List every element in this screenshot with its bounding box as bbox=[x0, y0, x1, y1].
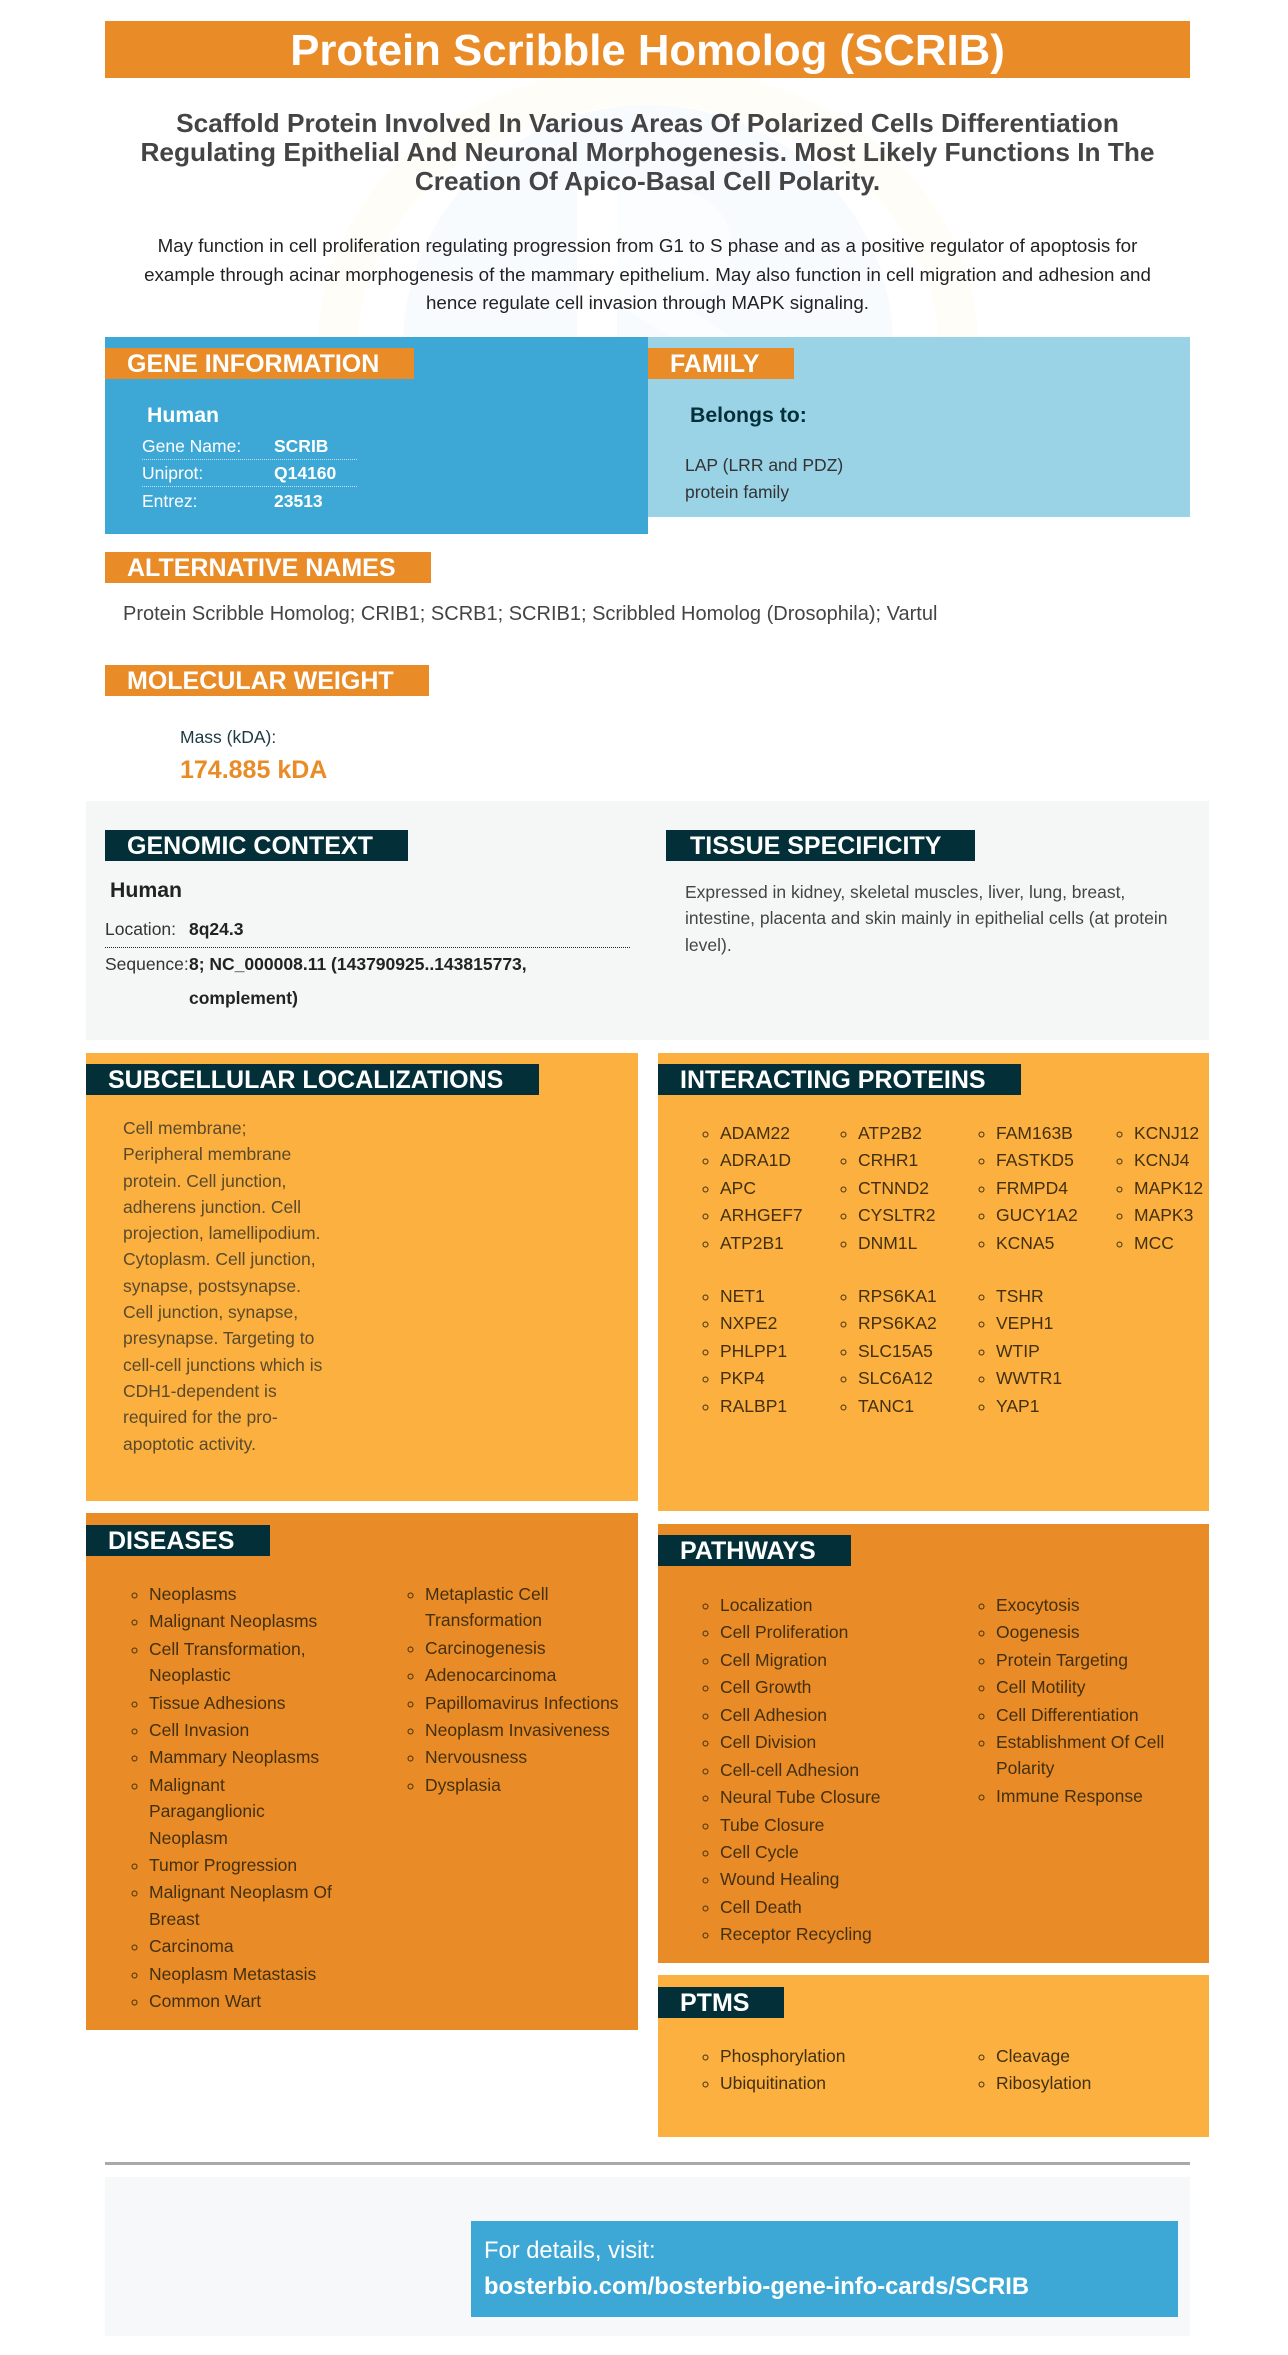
panel: ptms bbox=[658, 1975, 1209, 2137]
title: Protein Scribble Homolog (SCRIB) bbox=[290, 26, 1005, 75]
belongs to label: Belongs to: bbox=[690, 403, 807, 427]
protein list column 6: TANC1 bbox=[858, 1396, 914, 1416]
disease list column 1: Tissue Adhesions bbox=[149, 1693, 286, 1713]
ptm list column 1: Ubiquitination bbox=[720, 2073, 826, 2093]
disease list column 1: Mammary Neoplasms bbox=[149, 1747, 319, 1767]
protein list column 7: WTIP bbox=[996, 1341, 1040, 1361]
disease list column 2: Carcinogenesis bbox=[425, 1638, 546, 1658]
disease list column 1: Common Wart bbox=[149, 1991, 261, 2011]
disease list column 2: Metaplastic Cell bbox=[425, 1584, 549, 1604]
protein list column 4: KCNJ4 bbox=[1134, 1150, 1189, 1170]
sequence row: 8; NC_000008.11 (143790925..143815773, bbox=[189, 954, 527, 974]
protein list column 5: NET1 bbox=[720, 1286, 765, 1306]
panel: subcellular localizations bbox=[86, 1053, 638, 1501]
heading: subcellular localizations: SUBCELLULAR LOCALIZATIONS bbox=[108, 1066, 503, 1094]
gene name row bbox=[142, 433, 357, 460]
pathway list column 1: Cell Proliferation bbox=[720, 1622, 848, 1642]
protein list column 7: TSHR bbox=[996, 1286, 1044, 1306]
protein list column 5 bbox=[702, 1286, 787, 1416]
pathway list column 1: Neural Tube Closure bbox=[720, 1787, 880, 1807]
disease list column 2 bbox=[408, 1584, 619, 1795]
sequence row bbox=[105, 954, 527, 1008]
ptm list column 2 bbox=[978, 2046, 1091, 2093]
localization text: presynapse. Targeting to bbox=[123, 1328, 314, 1348]
protein list column 6: RPS6KA1 bbox=[858, 1286, 937, 1306]
disease list column 1: Malignant Neoplasms bbox=[149, 1611, 317, 1631]
mass value: 174.885 kDA bbox=[180, 756, 327, 784]
ptm list column 2: Cleavage bbox=[996, 2046, 1070, 2066]
protein list column 1: ATP2B1 bbox=[720, 1233, 784, 1253]
protein list column 7: WWTR1 bbox=[996, 1368, 1062, 1388]
protein list column 2: CRHR1 bbox=[858, 1150, 918, 1170]
pathway list column 2: Immune Response bbox=[996, 1786, 1143, 1806]
uniprot row: Q14160 bbox=[274, 463, 336, 483]
protein list column 6: SLC6A12 bbox=[858, 1368, 933, 1388]
protein list column 3: KCNA5 bbox=[996, 1233, 1054, 1253]
panel: family bbox=[648, 337, 1190, 517]
localization text: Cell membrane; bbox=[123, 1118, 247, 1138]
disease list column 1 bbox=[132, 1584, 332, 2011]
localization text: Peripheral membrane bbox=[123, 1144, 291, 1164]
protein list column 5: NXPE2 bbox=[720, 1313, 777, 1333]
localization text: synapse, postsynapse. bbox=[123, 1276, 301, 1296]
entrez row: 23513 bbox=[274, 491, 323, 511]
protein list column 1: ADRA1D bbox=[720, 1150, 791, 1170]
heading: genomic context: GENOMIC CONTEXT bbox=[127, 832, 373, 860]
gene name row: SCRIB bbox=[274, 436, 328, 456]
subtitle: Regulating Epithelial And Neuronal Morphogenesis. Most Likely Functions In The bbox=[140, 137, 1155, 167]
subtitle: Creation Of Apico-Basal Cell Polarity. bbox=[415, 166, 880, 196]
pathway list column 2 bbox=[978, 1595, 1164, 1806]
disease list column 1: Neoplasms bbox=[149, 1584, 237, 1604]
heading: diseases bbox=[86, 1525, 270, 1556]
pathway list column 1: Cell-cell Adhesion bbox=[720, 1760, 859, 1780]
disease list column 1: Tumor Progression bbox=[149, 1855, 297, 1875]
uniprot row: Uniprot: bbox=[142, 463, 203, 483]
pathway list column 1: Cell Growth bbox=[720, 1677, 811, 1697]
disease list column 2: Dysplasia bbox=[425, 1775, 501, 1795]
pathway list column 1: Localization bbox=[720, 1595, 812, 1615]
pathway list column 1: Cell Adhesion bbox=[720, 1705, 827, 1725]
protein list column 6 bbox=[840, 1286, 937, 1416]
pathway list column 1: Cell Migration bbox=[720, 1650, 827, 1670]
protein list column 6: SLC15A5 bbox=[858, 1341, 933, 1361]
subtitle: Scaffold Protein Involved In Various Areas Of Polarized Cells Differentiation bbox=[176, 108, 1119, 138]
tissue specificity text: Expressed in kidney, skeletal muscles, liver, lung, breast, bbox=[685, 882, 1125, 902]
pathway list column 1: Tube Closure bbox=[720, 1814, 824, 1834]
protein list column 3: FAM163B bbox=[996, 1123, 1073, 1143]
heading: family bbox=[648, 348, 794, 379]
heading: pathways bbox=[658, 1535, 851, 1566]
protein list column 7 bbox=[978, 1286, 1062, 1416]
protein list column 5: RALBP1 bbox=[720, 1396, 787, 1416]
disease list column 2: Neoplasm Invasiveness bbox=[425, 1720, 610, 1740]
protein list column 2: CTNND2 bbox=[858, 1178, 929, 1198]
description: example through acinar morphogenesis of the mammary epithelium. May also function in cell migration and adhesion and bbox=[144, 264, 1151, 284]
heading: tissue specificity: TISSUE SPECIFICITY bbox=[690, 832, 941, 860]
alternative names text: Protein Scribble Homolog; CRIB1; SCRB1; SCRIB1; Scribbled Homolog (Drosophila); Vartul bbox=[123, 603, 937, 625]
callout: details link bbox=[471, 2221, 1178, 2317]
disease list column 1: Paraganglionic bbox=[149, 1801, 265, 1821]
entrez row: Entrez: bbox=[142, 491, 197, 511]
protein list column 5: PHLPP1 bbox=[720, 1341, 787, 1361]
pathway list column 1: Receptor Recycling bbox=[720, 1924, 872, 1944]
description: hence regulate cell invasion through MAPK signaling. bbox=[426, 292, 869, 313]
protein list column 4: KCNJ12 bbox=[1134, 1123, 1199, 1143]
heading: diseases: DISEASES bbox=[108, 1527, 234, 1555]
disease list column 1: Cell Invasion bbox=[149, 1720, 249, 1740]
disease list column 1: Malignant Neoplasm Of bbox=[149, 1882, 332, 1902]
disease list column 1: Breast bbox=[149, 1909, 200, 1929]
pathway list column 2: Cell Motility bbox=[996, 1677, 1085, 1697]
family text bbox=[685, 455, 843, 502]
ptm list column 1: Phosphorylation bbox=[720, 2046, 846, 2066]
location row: 8q24.3 bbox=[189, 919, 243, 939]
tissue specificity text: level). bbox=[685, 935, 732, 955]
protein list column 4 bbox=[1116, 1123, 1203, 1253]
pathway list column 1: Cell Division bbox=[720, 1732, 816, 1752]
pathway list column 1: Cell Death bbox=[720, 1897, 802, 1917]
disease list column 1: Carcinoma bbox=[149, 1936, 234, 1956]
disease list column 2: Papillomavirus Infections bbox=[425, 1693, 619, 1713]
pathway list column 2: Establishment Of Cell bbox=[996, 1732, 1164, 1752]
protein list column 1: ARHGEF7 bbox=[720, 1205, 803, 1225]
protein list column 1: APC bbox=[720, 1178, 756, 1198]
heading: family: FAMILY bbox=[670, 350, 759, 378]
family text: LAP (LRR and PDZ) bbox=[685, 455, 843, 475]
protein list column 7: YAP1 bbox=[996, 1396, 1039, 1416]
disease list column 1: Neoplasm bbox=[149, 1828, 228, 1848]
protein list column 5: PKP4 bbox=[720, 1368, 765, 1388]
disease list column 2: Transformation bbox=[425, 1610, 542, 1630]
protein list column 1: ADAM22 bbox=[720, 1123, 790, 1143]
disease list column 2: Adenocarcinoma bbox=[425, 1665, 556, 1685]
species: human: Human bbox=[110, 878, 182, 902]
localization text: adherens junction. Cell bbox=[123, 1197, 301, 1217]
protein list column 4: MAPK3 bbox=[1134, 1205, 1193, 1225]
subtitle bbox=[140, 108, 1155, 196]
disease list column 1: Malignant bbox=[149, 1775, 225, 1795]
panel: interacting proteins bbox=[658, 1053, 1209, 1511]
heading: molecular weight: MOLECULAR WEIGHT bbox=[127, 667, 394, 695]
panel: genomic context and tissue specificity bbox=[86, 801, 1209, 1040]
pathway list column 2: Cell Differentiation bbox=[996, 1705, 1139, 1725]
mass label: Mass (kDA): bbox=[180, 727, 276, 747]
sequence row: Sequence: bbox=[105, 954, 189, 974]
localization text: cell-cell junctions which is bbox=[123, 1355, 322, 1375]
panel: gene information bbox=[105, 337, 648, 534]
species: human: Human bbox=[147, 403, 219, 427]
description bbox=[144, 235, 1151, 313]
sequence row: complement) bbox=[189, 988, 298, 1008]
panel: footer bbox=[105, 2177, 1190, 2336]
heading: gene information: GENE INFORMATION bbox=[127, 350, 379, 378]
heading: ptms bbox=[658, 1987, 784, 2018]
panel: diseases bbox=[86, 1513, 638, 2030]
disease list column 1: Neoplastic bbox=[149, 1665, 231, 1685]
gene name row: Gene Name: bbox=[142, 436, 241, 456]
location row bbox=[105, 916, 630, 948]
ptm list column 2: Ribosylation bbox=[996, 2073, 1091, 2093]
pathway list column 2: Polarity bbox=[996, 1758, 1054, 1778]
disease list column 2: Nervousness bbox=[425, 1747, 527, 1767]
localization text: apoptotic activity. bbox=[123, 1434, 256, 1454]
protein list column 6: RPS6KA2 bbox=[858, 1313, 937, 1333]
protein list column 2: DNM1L bbox=[858, 1233, 917, 1253]
heading: ptms: PTMS bbox=[680, 1989, 749, 2017]
family text: protein family bbox=[685, 482, 789, 502]
uniprot row bbox=[142, 460, 357, 487]
ptm list column 1 bbox=[702, 2046, 846, 2093]
pathway list column 1: Cell Cycle bbox=[720, 1842, 799, 1862]
localization text: protein. Cell junction, bbox=[123, 1171, 286, 1191]
pathway list column 2: Exocytosis bbox=[996, 1595, 1080, 1615]
heading: alternative names: ALTERNATIVE NAMES bbox=[127, 554, 396, 582]
protein list column 3: FRMPD4 bbox=[996, 1178, 1068, 1198]
tissue specificity text bbox=[685, 882, 1168, 955]
details url: bosterbio.com/bosterbio-gene-info-cards/SCRIB bbox=[484, 2273, 1029, 2300]
heading: interacting proteins: INTERACTING PROTEINS bbox=[680, 1066, 986, 1094]
pathway list column 2: Oogenesis bbox=[996, 1622, 1080, 1642]
location row: Location: bbox=[105, 919, 176, 939]
protein list column 3: FASTKD5 bbox=[996, 1150, 1074, 1170]
protein list column 3: GUCY1A2 bbox=[996, 1205, 1078, 1225]
details label: For details, visit: bbox=[484, 2237, 656, 2264]
protein list column 3 bbox=[978, 1123, 1078, 1253]
title bbox=[105, 21, 1190, 78]
localization text bbox=[123, 1118, 322, 1454]
protein list column 7: VEPH1 bbox=[996, 1313, 1053, 1333]
description: May function in cell proliferation regulating progression from G1 to S phase and as a positive regulator of apoptosis for bbox=[158, 235, 1137, 256]
protein list column 4: MCC bbox=[1134, 1233, 1174, 1253]
disease list column 1: Cell Transformation, bbox=[149, 1639, 306, 1659]
localization text: Cell junction, synapse, bbox=[123, 1302, 298, 1322]
tissue specificity text: intestine, placenta and skin mainly in epithelial cells (at protein bbox=[685, 908, 1168, 928]
localization text: CDH1-dependent is bbox=[123, 1381, 277, 1401]
heading: pathways: PATHWAYS bbox=[680, 1537, 816, 1565]
protein list column 2 bbox=[840, 1123, 935, 1253]
watermark logo bbox=[300, 78, 1000, 337]
localization text: required for the pro- bbox=[123, 1407, 278, 1427]
localization text: projection, lamellipodium. bbox=[123, 1223, 320, 1243]
protein list column 4: MAPK12 bbox=[1134, 1178, 1203, 1198]
pathway list column 1: Wound Healing bbox=[720, 1869, 839, 1889]
pathway list column 1 bbox=[702, 1595, 880, 1944]
pathway list column 2: Protein Targeting bbox=[996, 1650, 1128, 1670]
disease list column 1: Neoplasm Metastasis bbox=[149, 1964, 316, 1984]
protein list column 2: CYSLTR2 bbox=[858, 1205, 935, 1225]
protein list column 2: ATP2B2 bbox=[858, 1123, 922, 1143]
protein list column 1 bbox=[702, 1123, 803, 1253]
panel: pathways bbox=[658, 1524, 1209, 1963]
localization text: Cytoplasm. Cell junction, bbox=[123, 1249, 316, 1269]
entrez row bbox=[142, 491, 323, 511]
